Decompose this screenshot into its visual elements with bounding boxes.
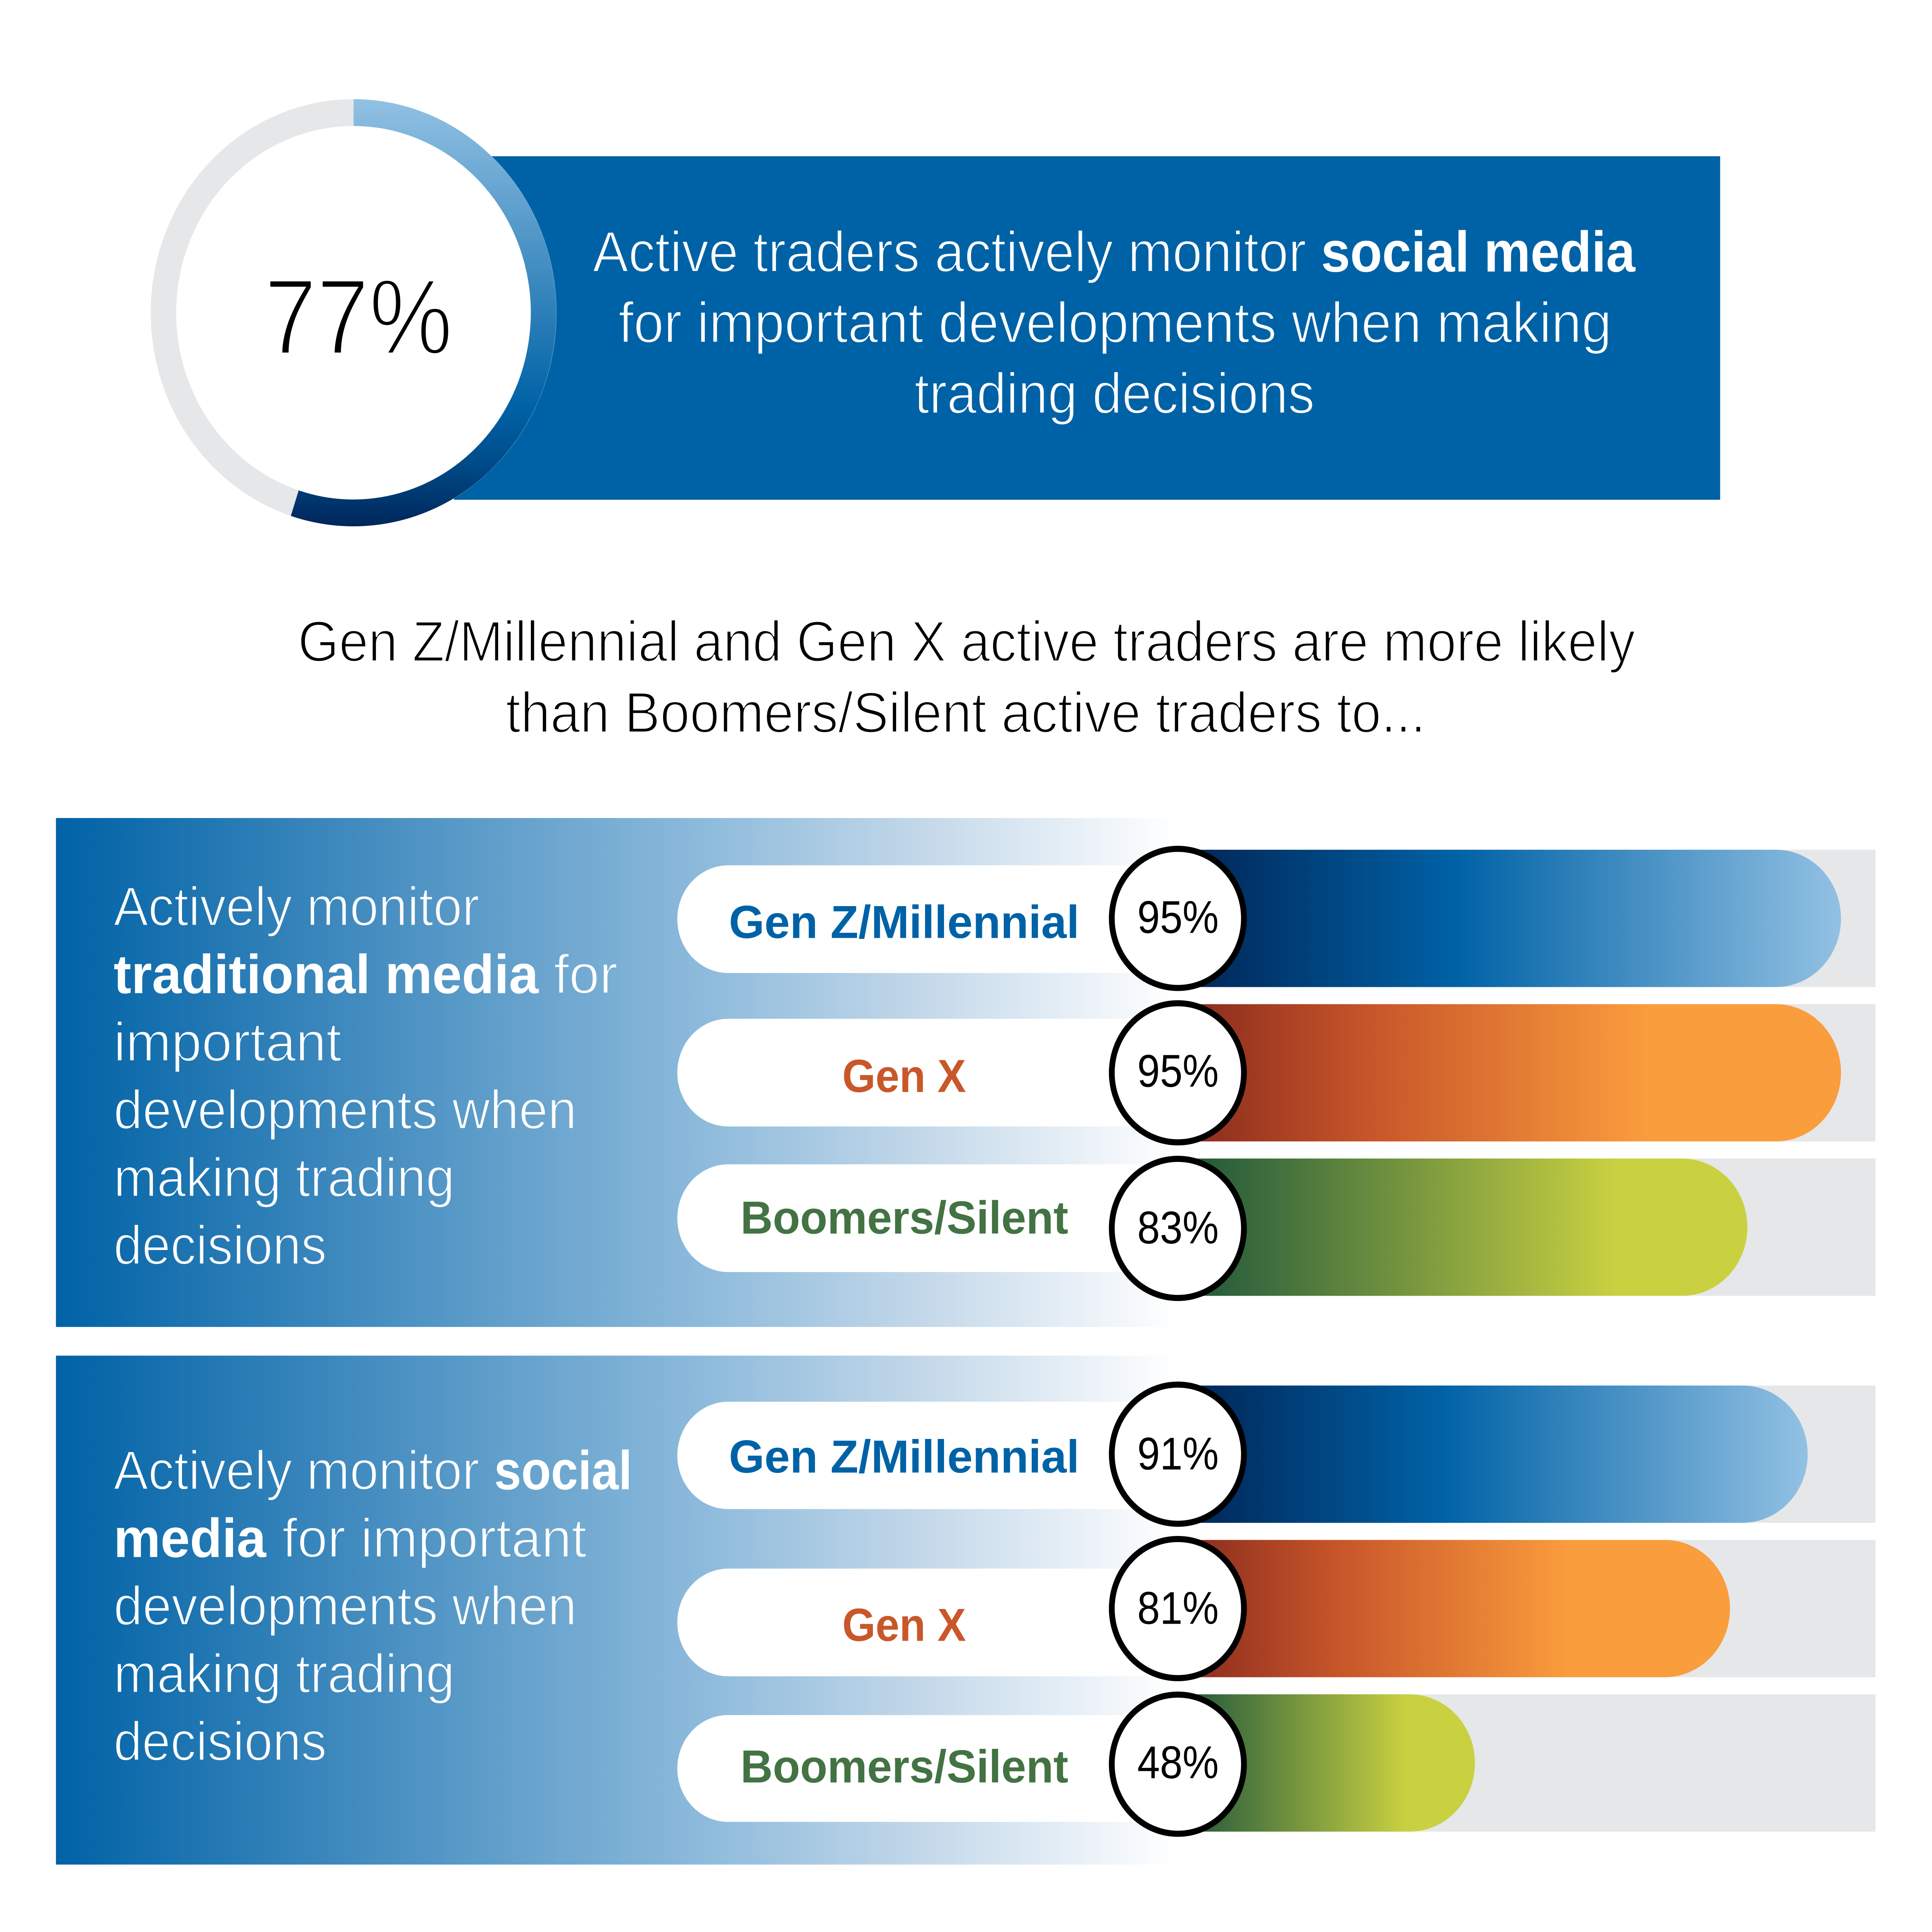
bar row: Gen X 95%: 95%	[1137, 1046, 1219, 1097]
bar row: Gen X 81%	[677, 1539, 1876, 1678]
bar row: Boomers/Silent 83%	[677, 1158, 1876, 1298]
panel heading: traditional media: important	[114, 1012, 342, 1073]
bar row: Boomers/Silent 83%: 83%	[1137, 1202, 1219, 1253]
panel heading: social media: for important	[282, 1508, 587, 1569]
panel heading: social media: decisions	[114, 1711, 327, 1772]
panel: social media	[56, 1355, 1876, 1864]
bar row: Boomers/Silent 83%: Boomers/Silent	[740, 1192, 1068, 1243]
banner text: social media	[1321, 219, 1636, 284]
bar row: Gen Z/Millennial 91%	[677, 1384, 1876, 1524]
panel heading: traditional media	[114, 876, 617, 1276]
panel heading: social media: making trading	[114, 1643, 455, 1704]
bar row: Gen X 81%: Gen X	[842, 1599, 966, 1651]
intro text: Gen Z/Millennial and Gen X active traders are more likely	[298, 609, 1635, 673]
bar row: Gen X 95%: Gen X	[842, 1050, 966, 1102]
panel heading: social media	[114, 1440, 632, 1772]
bar row: Gen X 95%	[677, 1003, 1876, 1142]
bar row: Gen Z/Millennial 95%	[677, 849, 1876, 988]
intro text: than Boomers/Silent active traders to...	[506, 680, 1426, 745]
panel heading: traditional media: for	[554, 944, 617, 1005]
banner text: Active traders actively monitor	[593, 219, 1306, 284]
panel: traditional media	[56, 818, 1876, 1327]
donut chart: 77%	[163, 112, 544, 513]
donut value: 77%	[264, 257, 453, 377]
panel heading: traditional media: making trading	[114, 1147, 455, 1208]
banner: social media statistic	[454, 156, 1720, 500]
panel heading: traditional media: Actively monitor	[114, 876, 480, 937]
panel heading: social media: social	[494, 1440, 632, 1501]
banner text: for important developments when making	[619, 291, 1612, 355]
panel heading: social media: developments when	[114, 1576, 577, 1637]
panel heading: traditional media: developments when	[114, 1080, 577, 1141]
bar row: Boomers/Silent 48%: 48%	[1137, 1737, 1219, 1788]
bar row: Boomers/Silent 48%	[677, 1694, 1876, 1834]
bar row: Gen X 81%: 81%	[1137, 1583, 1219, 1634]
panel heading: traditional media: traditional media	[114, 944, 539, 1005]
bar row: Gen Z/Millennial 95%: 95%	[1137, 892, 1219, 943]
banner text	[593, 219, 1636, 425]
bar row: Gen Z/Millennial 95%: Gen Z/Millennial	[729, 896, 1079, 948]
bar row: Gen Z/Millennial 91%: 91%	[1137, 1428, 1219, 1480]
bar row: Boomers/Silent 48%: Boomers/Silent	[740, 1740, 1068, 1793]
bar row: Gen Z/Millennial 91%: Gen Z/Millennial	[729, 1430, 1079, 1482]
panel heading: social media: Actively monitor	[114, 1440, 480, 1501]
panel heading: social media: media	[114, 1508, 266, 1569]
banner text: trading decisions	[914, 361, 1315, 425]
panel heading: traditional media: decisions	[114, 1215, 327, 1276]
intro text	[298, 609, 1635, 745]
